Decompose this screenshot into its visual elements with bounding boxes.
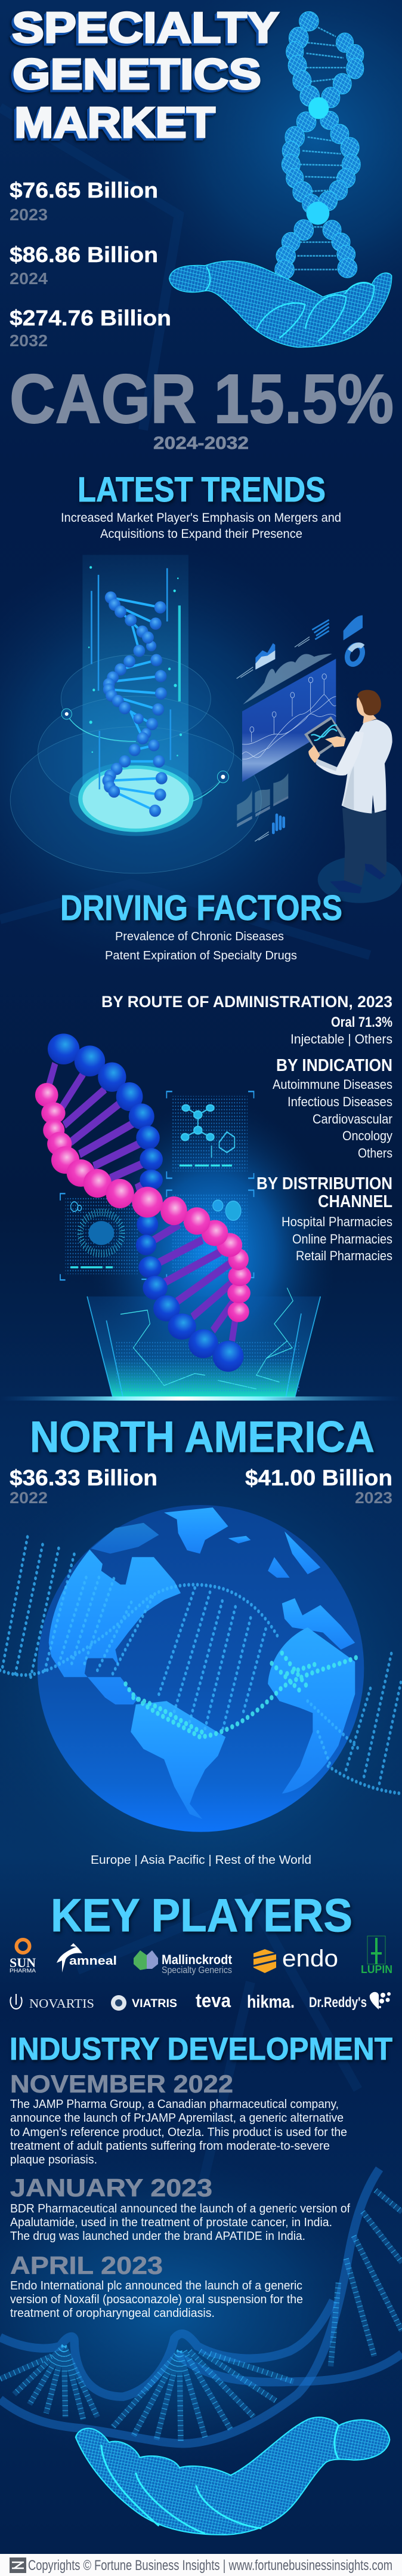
- pink strand: [35, 1083, 251, 1322]
- value 2022: [10, 1466, 157, 1507]
- chart: mountain area: [243, 654, 332, 704]
- chart: main dashboard panel: [242, 658, 336, 782]
- logo: Mallinckrodt: [134, 1950, 233, 1975]
- logo: Novartis: [10, 1994, 94, 2011]
- neck: [357, 697, 377, 724]
- logo: Dr. Reddy's: Dr.Reddy's: [309, 1995, 367, 2011]
- rungs: [48, 1063, 236, 1341]
- development: April 2023: Endo International plc announced the launch of a generic: [10, 2279, 302, 2292]
- logo: Teva: teva: [196, 1990, 231, 2011]
- logo: Sun Pharma: [10, 1940, 36, 1974]
- CAGR: 2024-2032: [153, 433, 249, 453]
- heading: north america: NORTH AMERICA: [30, 1413, 375, 1461]
- segment: route of administration: BY ROUTE OF ADMINISTRATION, 2023: [101, 993, 392, 1011]
- heading: latest trends: LATEST TRENDS: [78, 470, 326, 509]
- segment: indication: BY INDICATION: [276, 1056, 392, 1075]
- segment: indication: Others: [358, 1146, 392, 1161]
- footer: [0, 2554, 402, 2576]
- text: driving factors: Patent Expiration of Specialty Drugs: [105, 949, 297, 962]
- text: other regions: Europe | Asia Pacific | Rest of the World: [91, 1854, 311, 1867]
- beam cup: [87, 1297, 320, 1398]
- segment: route of administration: [101, 993, 392, 1047]
- development: November 2022: treatment of adult patients suffering from moderate-to-severe: [10, 2140, 330, 2153]
- logo: Sun Pharma: SUN: [10, 1955, 36, 1970]
- ribbons: [0, 2169, 402, 2443]
- market value 2024: $86.86 Billion: [10, 242, 158, 267]
- title: GENETICS: [13, 51, 261, 99]
- segment: distribution channel: CHANNEL: [318, 1192, 392, 1211]
- illustration: mesh DNA and hand: [0, 2169, 402, 2535]
- development: January 2023: JANUARY 2023: [10, 2174, 212, 2202]
- logo: Lupin: LUPIN: [361, 1963, 392, 1975]
- tablet: [304, 716, 345, 755]
- text: latest trends: Increased Market Player's Emphasis on Mergers and: [61, 511, 341, 525]
- logo: Sun Pharma: PHARMA: [10, 1968, 36, 1974]
- value 2023: [245, 1466, 392, 1507]
- chart: top right area: [344, 615, 363, 641]
- segment: indication: [273, 1056, 392, 1161]
- development: November 2022: The JAMP Pharma Group, a Canadian pharmaceutical company,: [10, 2098, 339, 2111]
- development: November 2022: to Amgen's reference product, Otezla. This product is used for the: [10, 2126, 347, 2139]
- development: November 2022: [10, 2070, 347, 2166]
- logo: Mallinckrodt: Specialty Generics: [162, 1965, 232, 1975]
- market value 2023: 2023: [10, 205, 48, 224]
- text: driving factors: [105, 930, 297, 962]
- chart: small columns: [273, 815, 284, 833]
- logo: Endo: endo: [282, 1946, 338, 1972]
- chart: small area: [255, 643, 275, 670]
- virus: [81, 1212, 122, 1254]
- heading: key players: KEY PLAYERS: [51, 1889, 352, 1941]
- heading: driving factors: DRIVING FACTORS: [60, 888, 342, 928]
- market value 2024: 2024: [10, 269, 48, 288]
- market value 2032: 2032: [10, 331, 48, 350]
- title: SPECIALTY: [12, 4, 279, 52]
- segment: indication: Infectious Diseases: [287, 1094, 392, 1109]
- logo: Novartis: NOVARTIS: [29, 1996, 94, 2011]
- hand: [76, 2417, 389, 2535]
- rungs: [0, 2190, 402, 2441]
- illustration: DNA hologram platform: [10, 555, 261, 873]
- person: [304, 690, 392, 894]
- segment: distribution channel: [256, 1174, 392, 1263]
- development: January 2023: BDR Pharmaceutical announced the launch of a generic version of: [10, 2202, 350, 2215]
- segment: indication: Autoimmune Diseases: [273, 1077, 392, 1092]
- value 2022: $36.33 Billion: [10, 1466, 157, 1490]
- segment: indication: Cardiovascular: [313, 1112, 392, 1127]
- legs: [342, 808, 386, 885]
- development: April 2023: treatment of oropharyngeal candidiasis.: [10, 2307, 215, 2320]
- market value 2023: $76.65 Billion: [10, 178, 158, 202]
- illustration: scientist and data dashboard: [237, 615, 402, 903]
- logo: Lupin: [361, 1936, 392, 1975]
- fake text lines: [237, 637, 310, 841]
- market value 2032: [10, 306, 171, 350]
- development: January 2023: Apalutamide, used in the treatment of prostate cancer, in India.: [10, 2216, 332, 2229]
- dotted helix: [0, 1533, 279, 1728]
- market value 2024: [10, 242, 158, 288]
- segment: distribution channel: Retail Pharmacies: [296, 1248, 392, 1263]
- text: latest trends: [61, 511, 341, 541]
- development: April 2023: [10, 2251, 303, 2320]
- text: latest trends: Acquisitions to Expand their Presence: [100, 527, 302, 541]
- hair: [357, 690, 381, 715]
- market value 2032: $274.76 Billion: [10, 306, 171, 330]
- upper blue strand: [48, 1033, 163, 1190]
- illustration: pink and blue DNA: [0, 1033, 402, 1406]
- illustration: globe: [0, 1505, 402, 1832]
- hands: [308, 736, 346, 763]
- globe sphere: [38, 1505, 364, 1832]
- logo: Hikma: hikma.: [247, 1992, 295, 2012]
- chart: panel lines: [242, 674, 336, 759]
- value 2023: 2023: [355, 1489, 392, 1507]
- glow line: [0, 1396, 402, 1401]
- icon: mesh DNA on hand: [169, 11, 392, 347]
- title: [12, 4, 279, 147]
- shoes: [330, 864, 385, 894]
- icon: footer logo: [10, 2557, 26, 2573]
- arm: [316, 731, 364, 775]
- development: November 2022: announce the launch of PrJAMP Apremilast, a generic alternative: [10, 2112, 344, 2125]
- logo: Amneal: [57, 1943, 117, 1972]
- logo: Mallinckrodt: Mallinckrodt: [162, 1952, 233, 1967]
- logo: Viatris: [111, 1995, 177, 2011]
- value 2023: $41.00 Billion: [245, 1466, 392, 1490]
- continents: [49, 1507, 355, 1819]
- development: November 2022: NOVEMBER 2022: [10, 2070, 233, 2098]
- molecule: [181, 1105, 234, 1158]
- coat: [342, 719, 392, 814]
- cells: [71, 1200, 241, 1220]
- development: January 2023: [10, 2174, 350, 2243]
- development: April 2023: version of Noxafil (posaconazole) oral suspension for the: [10, 2293, 303, 2306]
- development: April 2023: APRIL 2023: [10, 2251, 163, 2279]
- chart: bars: [312, 620, 329, 639]
- floor: [318, 856, 402, 903]
- lower blue strand: [136, 1214, 243, 1372]
- segment: route of administration: Injectable | Others: [290, 1032, 392, 1047]
- chart: lower panels: [237, 773, 288, 827]
- value 2022: 2022: [10, 1489, 48, 1507]
- segment: indication: Oncology: [342, 1128, 392, 1143]
- panels: [60, 1091, 254, 1280]
- segment: distribution channel: Online Pharmacies: [292, 1232, 392, 1247]
- development: January 2023: The drug was launched under the brand APATIDE in India.: [10, 2230, 305, 2243]
- development: November 2022: plaque psoriasis.: [10, 2153, 97, 2166]
- logo: Amneal: amneal: [69, 1955, 117, 1968]
- segment: distribution channel: Hospital Pharmacies: [282, 1214, 392, 1229]
- logo: Viatris: VIATRIS: [132, 1998, 177, 2010]
- logo: Endo: [253, 1946, 338, 1973]
- market value 2023: [10, 178, 158, 224]
- text: driving factors: Prevalence of Chronic Diseases: [115, 930, 284, 943]
- title: MARKET: [14, 99, 215, 147]
- chart: donut: [344, 643, 366, 667]
